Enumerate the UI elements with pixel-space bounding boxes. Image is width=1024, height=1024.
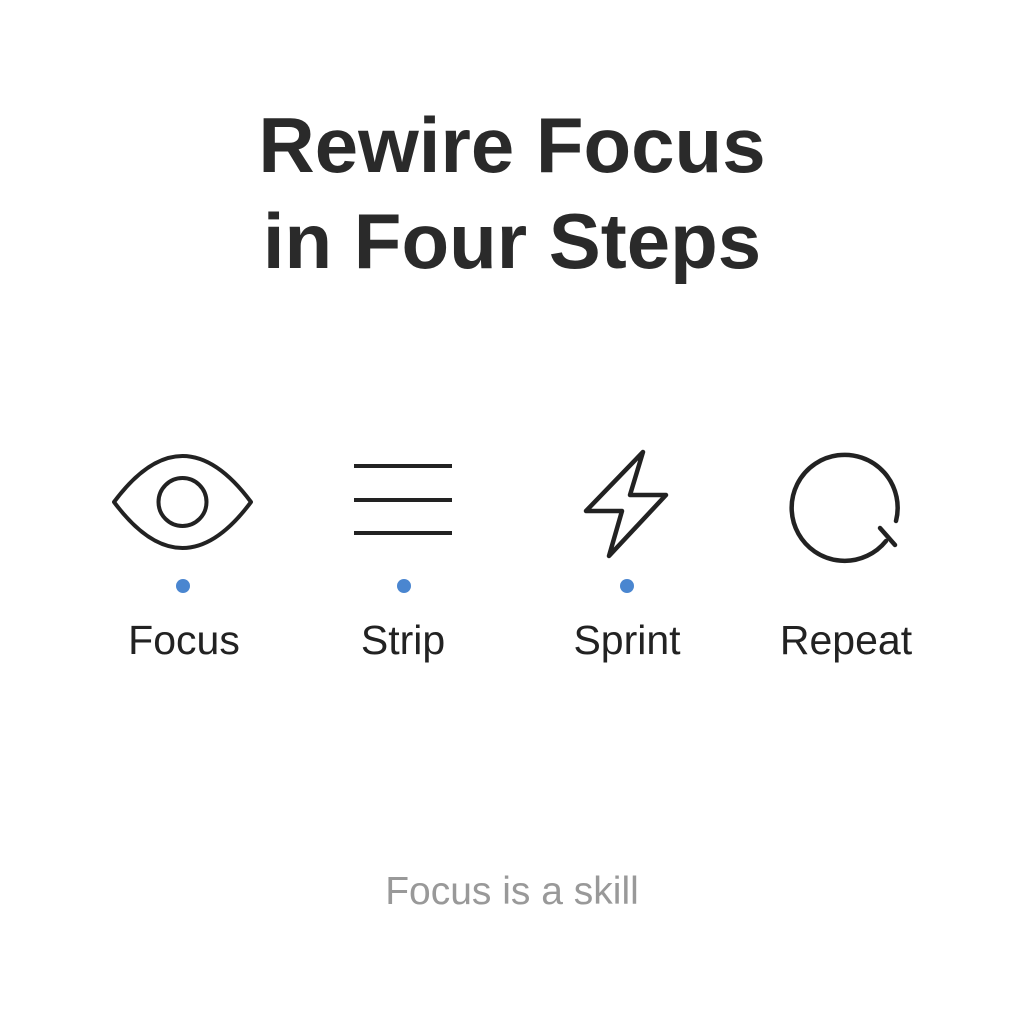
label: Focus: Focus <box>128 617 240 663</box>
label: Sprint: Sprint <box>573 617 681 663</box>
label: Repeat: Repeat <box>780 617 912 663</box>
title <box>258 101 766 285</box>
dot 2 <box>397 579 411 593</box>
dot 3 <box>620 579 634 593</box>
title: Rewire Focus <box>258 101 766 189</box>
icon: lines <box>354 464 452 535</box>
dot 1 <box>176 579 190 593</box>
label: Strip: Strip <box>361 617 445 663</box>
footer tagline: Focus is a skill <box>385 870 639 913</box>
icon: eye <box>112 454 253 550</box>
title: in Four Steps <box>263 197 761 285</box>
